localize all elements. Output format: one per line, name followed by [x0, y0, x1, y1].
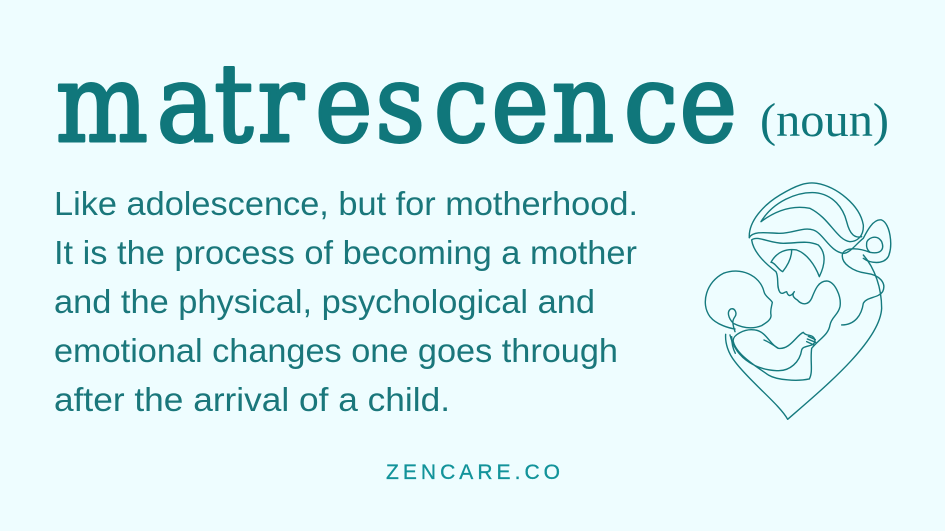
- definition text: emotional changes one goes through: [54, 332, 618, 369]
- part of speech: noun: (noun): [760, 94, 889, 147]
- definition text: It is the process of becoming a mother: [54, 234, 637, 271]
- icon: mother and baby line drawing: [705, 183, 891, 419]
- title: matrescence: matrescence: [56, 42, 737, 167]
- website credit: ZENCARE.CO: [386, 461, 560, 484]
- definition text: and the physical, psychological and: [54, 283, 595, 320]
- definition text: after the arrival of a child.: [54, 381, 450, 418]
- definition text: [54, 185, 638, 418]
- definition text: Like adolescence, but for motherhood.: [54, 185, 638, 222]
